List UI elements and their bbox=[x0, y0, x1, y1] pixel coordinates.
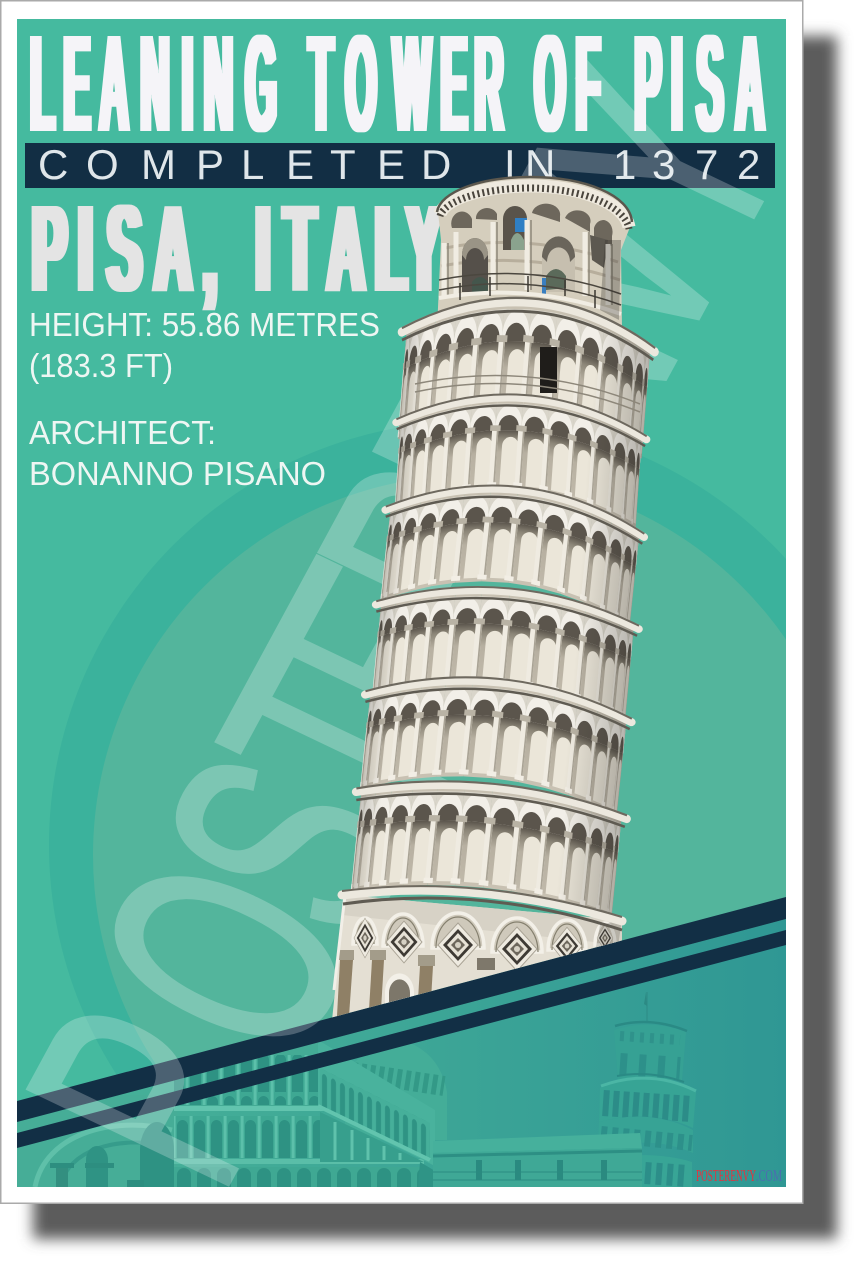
gallery 6 door and balustrade bbox=[415, 347, 640, 412]
cathedral nave upper storey bbox=[174, 1055, 318, 1105]
tower gallery 1 bbox=[350, 780, 631, 913]
tower gallery 2 bbox=[360, 676, 636, 811]
tower base with blind arches bbox=[331, 886, 622, 1030]
location heading: PISA, ITALY bbox=[32, 180, 441, 318]
facts text block: BONANNO PISANO bbox=[29, 455, 326, 492]
tower gallery 3 bbox=[372, 586, 643, 715]
facts text block: (183.3 FT) bbox=[29, 347, 173, 384]
photo: tinted Pisa cathedral square bbox=[17, 900, 786, 1187]
cathedral side wing bbox=[318, 1042, 435, 1187]
ground-storey cornice bbox=[342, 886, 622, 930]
facts text block: HEIGHT: 55.86 METRES bbox=[29, 306, 380, 343]
base arches bbox=[353, 913, 615, 952]
cathedral nave arcade bbox=[174, 1106, 424, 1187]
decorative circle: inner disc bbox=[93, 483, 786, 1064]
facts text block: ARCHITECT: bbox=[29, 414, 216, 451]
diagonal stripes bbox=[17, 897, 786, 1148]
decorative circle: outer ring bbox=[49, 428, 786, 1074]
cathedral transept roof and wall bbox=[433, 1133, 642, 1187]
subtitle bar bbox=[25, 141, 775, 188]
facts text block bbox=[29, 306, 380, 492]
tower belfry bbox=[437, 177, 632, 330]
panel: teal background bbox=[17, 19, 786, 1122]
leaning tower illustration bbox=[331, 177, 658, 1030]
cathedral dome bbox=[356, 1062, 447, 1140]
subtitle text: COMPLETED IN 1372 bbox=[38, 141, 760, 188]
brand logo: POSTERENVY bbox=[696, 1166, 756, 1185]
photo sky bbox=[121, 919, 786, 1187]
tower gallery 4 bbox=[380, 484, 648, 620]
base diamonds bbox=[354, 918, 376, 958]
base pilasters bbox=[337, 950, 495, 1016]
brand logo: .COM bbox=[756, 1166, 782, 1185]
small distant tower bbox=[598, 992, 696, 1187]
cathedral left facade bbox=[32, 1122, 174, 1187]
tower gallery 6 bbox=[393, 288, 658, 459]
title: LEANING TOWER OF PISA bbox=[30, 6, 764, 161]
tower gallery 5 bbox=[390, 386, 649, 528]
